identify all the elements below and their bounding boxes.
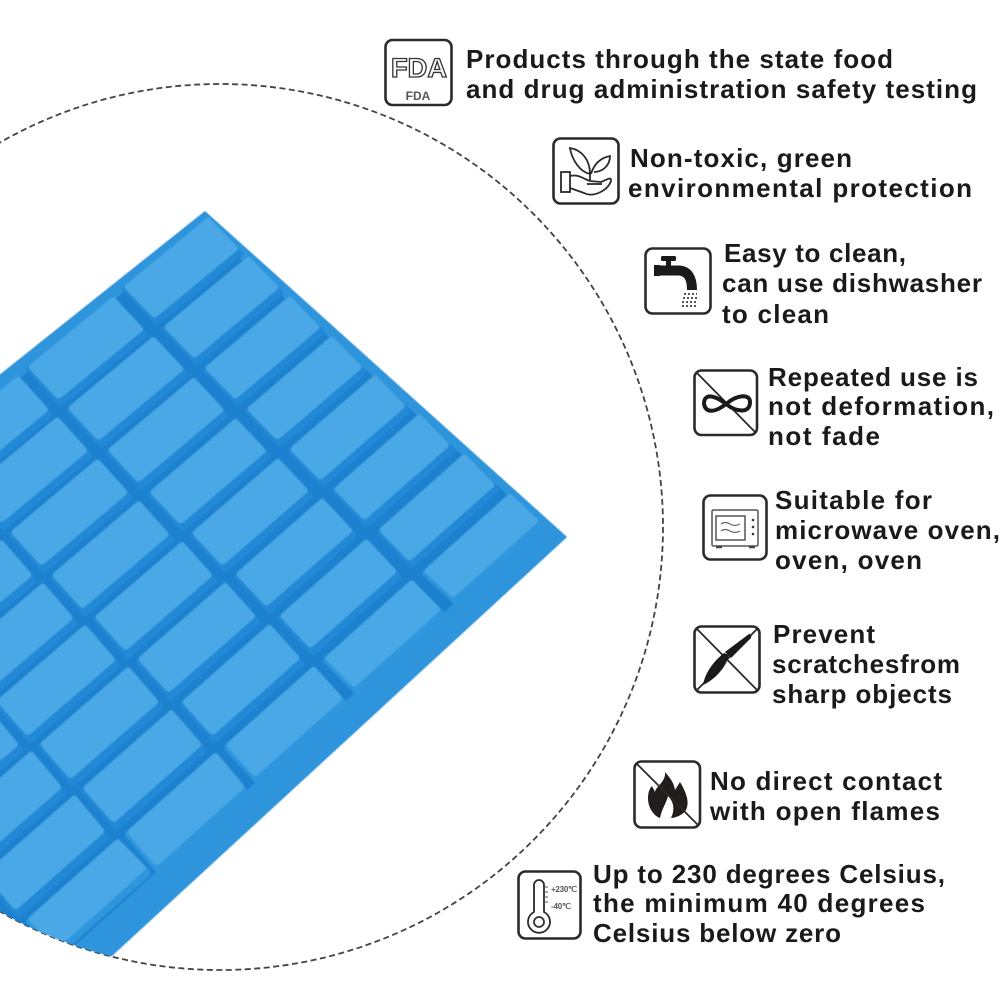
text: easy to clean: can use dishwasher xyxy=(722,268,982,298)
icon: plant in hand xyxy=(554,138,618,204)
text: FDA testing: and drug administration safety testing xyxy=(466,74,977,104)
text: sharp objects: Prevent xyxy=(773,619,875,649)
text: repeated use: not deformation, xyxy=(768,391,994,421)
text: temperature range: Celsius below zero xyxy=(593,918,841,948)
icon: FDA badge: FDA xyxy=(391,53,447,83)
feature 7: flames xyxy=(634,762,942,828)
text: microwave: oven, oven xyxy=(775,545,922,575)
text: repeated use: not fade xyxy=(768,421,880,451)
feature 2: non-toxic xyxy=(554,138,972,204)
text: non-toxic: Non-toxic, green xyxy=(630,143,852,173)
icon: crossed infinity xyxy=(694,370,757,435)
text: temperature range: the minimum 40 degrees xyxy=(593,888,925,918)
text: FDA testing: Products through the state food xyxy=(466,44,893,74)
text: microwave: microwave oven, xyxy=(775,515,1000,545)
icon: thermometer xyxy=(518,872,580,938)
feature 3: easy to clean xyxy=(646,238,982,329)
grid of rectangular cavities xyxy=(0,217,544,956)
feature 4: repeated use xyxy=(694,362,994,451)
text: sharp objects: scratchesfrom xyxy=(772,649,960,679)
icon: crossed knife xyxy=(694,626,760,692)
feature 5: microwave xyxy=(704,485,1000,575)
icon: thermometer: +230℃ xyxy=(551,885,577,894)
feature 1: FDA xyxy=(386,40,977,105)
icon: FDA badge: FDA xyxy=(406,89,431,103)
mold base sheet xyxy=(0,212,566,966)
text: temperature range: Up to 230 degrees Celsius, xyxy=(593,859,945,889)
icon: crossed flame xyxy=(634,762,700,828)
text: sharp objects: sharp objects xyxy=(772,679,952,709)
icon: faucet xyxy=(646,248,710,314)
text: flames: with open flames xyxy=(709,796,940,826)
product: blue silicone bar mold xyxy=(0,212,566,966)
feature 6: sharp objects xyxy=(694,619,960,709)
text: repeated use: Repeated use is xyxy=(768,362,978,392)
text: easy to clean: Easy to clean, xyxy=(724,238,906,268)
text: non-toxic: environmental protection xyxy=(628,173,972,203)
mold recess between cavities xyxy=(0,258,507,946)
icon: thermometer: -40℃ xyxy=(551,902,571,911)
text: easy to clean: to clean xyxy=(722,299,829,329)
text: microwave: Suitable for xyxy=(775,485,932,515)
feature 8: temperature xyxy=(518,859,945,948)
text: flames: No direct contact xyxy=(710,766,942,796)
icon: microwave oven xyxy=(704,496,766,560)
dashed circle outline xyxy=(0,84,663,970)
icon: FDA badge xyxy=(386,40,452,105)
